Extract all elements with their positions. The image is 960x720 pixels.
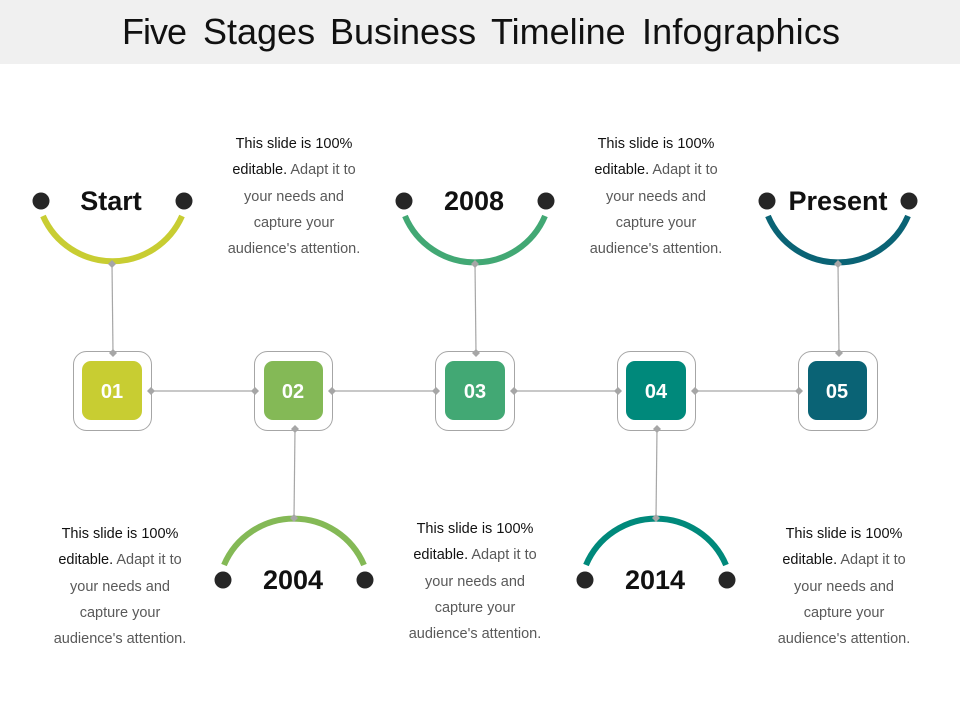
text block: top left	[228, 136, 360, 257]
text block: bottom right	[778, 526, 910, 647]
text block: bottom right: editable. Adapt it to	[782, 552, 906, 568]
milestone: 2004: 2004	[263, 565, 323, 595]
stage box 05: 05	[826, 381, 848, 403]
text block: bottom left	[54, 526, 186, 647]
milestone: 2004	[214, 425, 374, 595]
text block: top right: This slide is 100%	[598, 136, 715, 152]
stage box 01: 01	[101, 381, 123, 403]
milestone: Present	[758, 186, 918, 357]
text block: top left: This slide is 100%	[236, 136, 353, 152]
text block: bottom left: This slide is 100%	[62, 526, 179, 542]
text block: top right	[590, 136, 722, 257]
title bar: Five	[122, 11, 187, 52]
text block: bottom center: audience's attention.	[409, 626, 541, 642]
milestone: 2014: 2014	[625, 565, 685, 595]
text block: bottom left: editable. Adapt it to	[58, 552, 182, 568]
stage box 02: 02	[282, 381, 304, 403]
text block: bottom left: your needs and	[70, 579, 170, 595]
title bar	[0, 0, 960, 64]
text block: bottom center	[409, 521, 541, 642]
text block: bottom right: audience's attention.	[778, 631, 910, 647]
milestone: Start	[32, 186, 192, 357]
stage box 03: 03	[464, 381, 486, 403]
text block: bottom right: This slide is 100%	[786, 526, 903, 542]
milestone: 2008	[396, 186, 554, 357]
stage box 05	[798, 352, 878, 430]
stage box 04: 04	[645, 381, 668, 403]
text block: bottom center: This slide is 100%	[417, 521, 534, 537]
milestone: 2014	[576, 425, 736, 595]
text block: top left: audience's attention.	[228, 241, 360, 257]
stage box 04	[618, 352, 696, 430]
text block: bottom right: capture your	[804, 605, 884, 621]
title bar: Infographics	[642, 11, 840, 52]
text block: top right: your needs and	[606, 189, 706, 205]
text block: top right: audience's attention.	[590, 241, 722, 257]
connector: 03 to 04	[510, 387, 622, 395]
title bar: Stages	[203, 11, 315, 52]
text block: bottom left: capture your	[80, 605, 160, 621]
title bar: Timeline	[491, 11, 626, 52]
stage box 01	[74, 352, 152, 430]
connector: 02 to 03	[328, 387, 440, 395]
stage box 02	[254, 352, 332, 430]
text block: top left: capture your	[254, 215, 334, 231]
milestone: Start: Start	[80, 186, 142, 216]
milestone: 2008: 2008	[444, 186, 504, 216]
text block: top right: editable. Adapt it to	[594, 162, 718, 178]
text block: bottom center: your needs and	[425, 574, 525, 590]
milestone: Present: Present	[788, 186, 888, 216]
text block: top left: your needs and	[244, 189, 344, 205]
text block: bottom center: capture your	[435, 600, 515, 616]
title bar: Business	[330, 11, 476, 52]
stage box 03	[436, 352, 514, 430]
text block: bottom center: editable. Adapt it to	[413, 547, 537, 563]
text block: top right: capture your	[616, 215, 696, 231]
text block: top left: editable. Adapt it to	[232, 162, 356, 178]
connector: 01 to 02	[147, 387, 259, 395]
text block: bottom left: audience's attention.	[54, 631, 186, 647]
connector: 04 to 05	[691, 387, 803, 395]
text block: bottom right: your needs and	[794, 579, 894, 595]
